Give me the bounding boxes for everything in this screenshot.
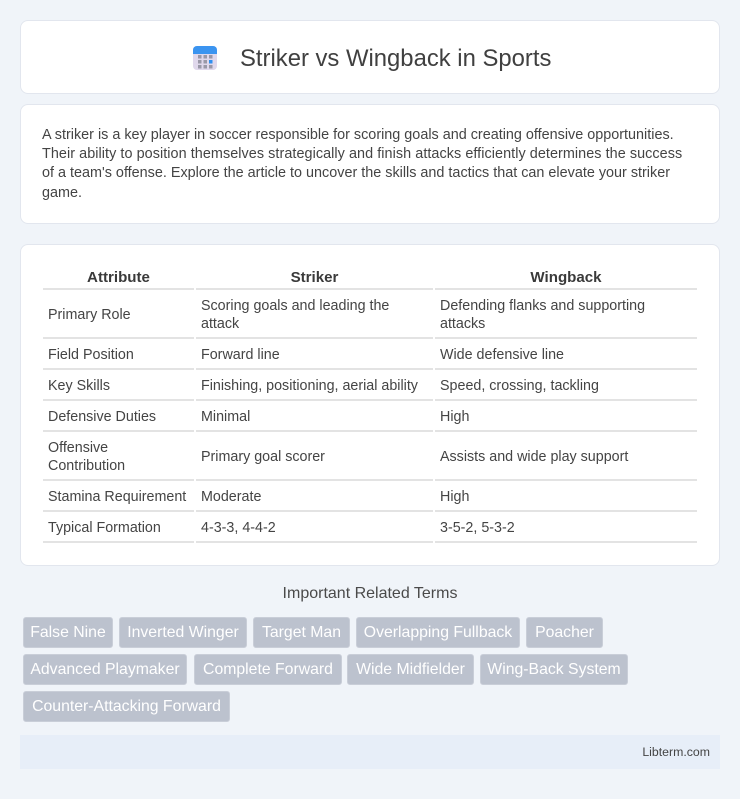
row: primary role: Primary Role <box>48 307 131 323</box>
row: stamina requirement <box>48 489 469 505</box>
table headings <box>87 269 602 286</box>
row: primary role: attacks <box>440 316 485 332</box>
row: typical formation: 3-5-2, 5-3-2 <box>440 520 515 536</box>
row: stamina requirement: Stamina Requirement <box>48 489 186 505</box>
panel: comparison table <box>20 244 720 566</box>
row: offensive contribution <box>48 440 628 474</box>
table headings: Striker <box>291 269 338 286</box>
row: offensive contribution: Primary goal scorer <box>201 449 325 465</box>
description text <box>42 127 682 201</box>
description text: of a team's offense. Explore the article to uncover the skills and tactics that can elevate your striker <box>42 165 670 181</box>
related term tags: Target Man <box>262 624 341 641</box>
related term tags: Inverted Winger <box>127 624 239 641</box>
related term tags: Wide Midfielder <box>356 661 465 678</box>
description text: Their ability to position themselves strategically and finish attacks efficiently determines the success <box>42 146 682 162</box>
related term tags <box>23 617 628 722</box>
row: typical formation: Typical Formation <box>48 520 161 536</box>
related term tags: Advanced Playmaker <box>30 661 180 678</box>
icon: calendar <box>193 46 217 70</box>
related term tags: Counter-Attacking Forward <box>32 698 221 715</box>
related term tags: Poacher <box>535 624 594 641</box>
row: field position: Wide defensive line <box>440 347 564 363</box>
title: Striker vs Wingback in Sports <box>240 45 551 72</box>
row: key skills: Speed, crossing, tackling <box>440 378 599 394</box>
row: key skills: Key Skills <box>48 378 110 394</box>
related term tags: Complete Forward <box>203 661 333 678</box>
description text: A striker is a key player in soccer responsible for scoring goals and creating offensive opportunities. <box>42 127 674 143</box>
table headings: Attribute <box>87 269 150 286</box>
panel: description <box>20 104 720 224</box>
row: defensive duties <box>48 409 469 425</box>
description text: game. <box>42 185 82 201</box>
row: stamina requirement: High <box>440 489 469 505</box>
row: primary role: Defending flanks and supporting <box>440 298 645 314</box>
row: defensive duties: High <box>440 409 469 425</box>
row: offensive contribution: Contribution <box>48 458 125 474</box>
footer credit: Libterm.com <box>642 745 710 759</box>
row: offensive contribution: Offensive <box>48 440 108 456</box>
row: defensive duties: Minimal <box>201 409 250 425</box>
row: primary role <box>48 298 645 332</box>
row: defensive duties: Defensive Duties <box>48 409 156 425</box>
panel: header <box>20 20 720 94</box>
footer bar <box>20 735 720 769</box>
table headings: Wingback <box>530 269 602 286</box>
row: key skills <box>48 378 599 394</box>
related terms heading: Important Related Terms <box>283 585 457 602</box>
row: field position <box>48 347 564 363</box>
row: field position: Forward line <box>201 347 280 363</box>
row: typical formation <box>48 520 515 536</box>
row: stamina requirement: Moderate <box>201 489 261 505</box>
row: primary role: Scoring goals and leading the <box>201 298 389 314</box>
related term tags: False Nine <box>30 624 106 641</box>
related term tags: Overlapping Fullback <box>364 624 512 641</box>
row dividers <box>43 288 697 543</box>
related term tags: Wing-Back System <box>487 661 621 678</box>
row: key skills: Finishing, positioning, aerial ability <box>201 378 418 394</box>
row: primary role: attack <box>201 316 239 332</box>
row: typical formation: 4-3-3, 4-4-2 <box>201 520 276 536</box>
row: offensive contribution: Assists and wide play support <box>440 449 628 465</box>
row: field position: Field Position <box>48 347 134 363</box>
